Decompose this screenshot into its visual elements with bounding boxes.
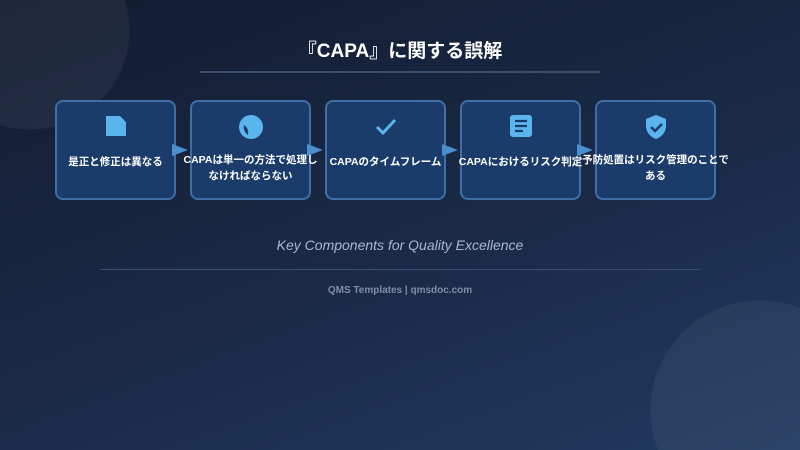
- icon: document: [106, 116, 126, 136]
- arrow 2: [307, 144, 323, 156]
- icon: globe: [239, 115, 263, 139]
- text: 予防処置はリスク管理のことで: [582, 154, 729, 166]
- text: 是正と修正は異なる: [68, 156, 163, 168]
- arrow 3: [442, 144, 458, 156]
- arrow 1: [172, 144, 188, 156]
- text: CAPAのタイムフレーム: [330, 156, 441, 168]
- text: [582, 154, 729, 182]
- card 4: [460, 100, 581, 200]
- card 2: [190, 100, 311, 200]
- text: CAPAは単一の方法で処理しなければならない: [184, 154, 317, 182]
- text: CAPAにおけるリスク判定: [459, 156, 582, 168]
- icon: list: [510, 115, 532, 137]
- text: ある: [645, 170, 666, 182]
- card 5: [595, 100, 716, 200]
- arrow 4: [577, 144, 593, 156]
- title: 『CAPA』に関する誤解: [298, 41, 502, 62]
- card 3: [325, 100, 446, 200]
- footer: QMS Templates | qmsdoc.com: [328, 285, 472, 296]
- icon: check: [376, 119, 396, 135]
- icon: shield: [646, 115, 666, 139]
- subtitle: Key Components for Quality Excellence: [277, 237, 523, 253]
- card 1: [55, 100, 176, 200]
